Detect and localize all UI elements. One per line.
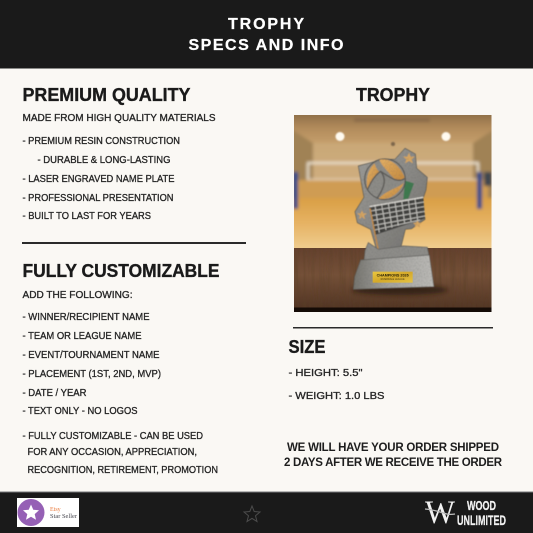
quality feature list: - DURABLE & LONG-LASTING	[38, 154, 170, 166]
etsy star seller badge: Etsy	[50, 507, 61, 513]
panel: fully customizable	[22, 261, 220, 476]
quality intro text: MADE FROM HIGH QUALITY MATERIALS	[22, 112, 216, 124]
heading: fully customizable: FULLY CUSTOMIZABLE	[22, 261, 220, 281]
icon: purple seal with star	[18, 499, 44, 526]
title	[188, 16, 344, 54]
header band	[0, 0, 533, 69]
customization list: - PLACEMENT (1ST, 2ND, MVP)	[22, 368, 161, 380]
customization list: - TEXT ONLY - NO LOGOS	[22, 405, 138, 417]
footer band	[0, 492, 533, 533]
trophy shadow	[352, 285, 448, 295]
volleyball trophy	[353, 148, 434, 289]
customization list: - WINNER/RECIPIENT NAME	[22, 311, 150, 323]
name plate	[373, 272, 413, 283]
panel: premium quality	[22, 85, 216, 222]
volleyball	[365, 159, 405, 200]
customization list	[22, 311, 161, 417]
weight spec: - WEIGHT: 1.0 LBS	[288, 390, 384, 402]
trophy base	[353, 243, 434, 289]
quality feature list: - PROFESSIONAL PRESENTATION	[22, 192, 174, 204]
wood unlimited logo: WOOD	[467, 498, 496, 513]
ceiling lights	[336, 132, 450, 146]
occasions note: - FULLY CUSTOMIZABLE - CAN BE USED	[22, 430, 203, 442]
customization intro text: ADD THE FOLLOWING:	[22, 289, 132, 301]
icon: outline star	[244, 506, 260, 522]
shipping note: 2 DAYS AFTER WE RECEIVE THE ORDER	[284, 457, 503, 469]
quality feature list: - LASER ENGRAVED NAME PLATE	[22, 173, 174, 185]
trophy sculpture	[353, 148, 434, 289]
net	[369, 197, 425, 251]
title: TROPHY	[228, 16, 304, 33]
occasions note	[22, 430, 218, 476]
shipping note: WE WILL HAVE YOUR ORDER SHIPPED	[287, 442, 499, 454]
title: SPECS AND INFO	[188, 37, 344, 54]
wood unlimited logo	[425, 495, 506, 531]
trophy body	[355, 148, 427, 250]
quality feature list	[22, 135, 180, 222]
quality feature list: - BUILT TO LAST FOR YEARS	[22, 210, 151, 222]
customization list: - TEAM OR LEAGUE NAME	[22, 330, 142, 342]
occasions note: RECOGNITION, RETIREMENT, PROMOTION	[28, 464, 218, 476]
logo mark W: W	[425, 495, 456, 531]
gym background	[294, 115, 492, 248]
trophy photo	[294, 115, 492, 312]
heading: trophy: TROPHY	[356, 85, 430, 105]
etsy star seller badge	[17, 498, 79, 527]
heading: premium quality: PREMIUM QUALITY	[22, 85, 190, 105]
customization list: - DATE / YEAR	[22, 387, 87, 399]
occasions note: FOR ANY OCCASION, APPRECIATION,	[28, 446, 197, 458]
customization list: - EVENT/TOURNAMENT NAME	[22, 349, 160, 361]
shipping note	[284, 442, 503, 469]
stars	[357, 153, 422, 228]
panel: size	[288, 337, 384, 402]
height spec: - HEIGHT: 5.5"	[288, 367, 363, 379]
quality feature list: - PREMIUM RESIN CONSTRUCTION	[22, 135, 180, 147]
wooden table	[290, 248, 496, 312]
wood unlimited logo: UNLIMITED	[457, 512, 506, 528]
name plate: RIVERDALE LEAGUE	[381, 278, 405, 281]
etsy star seller badge: Star Seller	[50, 514, 77, 520]
heading: size: SIZE	[288, 337, 326, 357]
name plate: CHAMPIONS 2026	[377, 273, 409, 277]
